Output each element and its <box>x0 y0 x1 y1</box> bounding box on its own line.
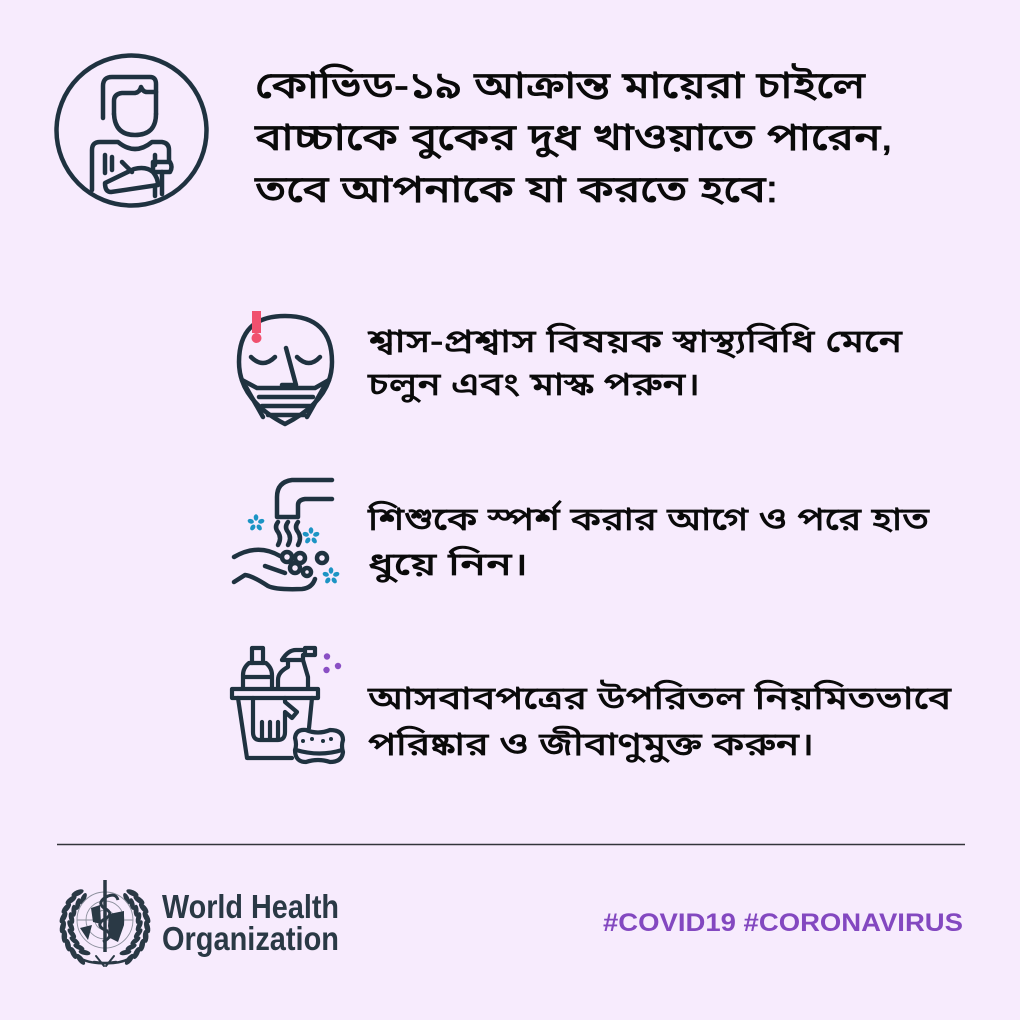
icon: cleaning supplies <box>232 648 343 762</box>
wordmark: World Health <box>162 888 339 925</box>
wordmark: Organization <box>162 920 339 957</box>
text: respiratory hygiene <box>367 323 903 403</box>
icon: mother holding baby <box>56 56 206 206</box>
text: clean surfaces <box>367 680 952 763</box>
text: clean surfaces: পরিষ্কার ও জীবাণুমুক্ত করুন। <box>368 726 814 763</box>
text: wash hands <box>367 500 929 583</box>
text: wash hands: শিশুকে স্পর্শ করার আগে ও পরে হাত <box>367 500 929 537</box>
text: respiratory hygiene: শ্বাস-প্রশ্বাস বিষয়ক স্বাস্থ্যবিধি মেনে <box>367 323 903 359</box>
text: clean surfaces: আসবাবপত্রের উপরিতল নিয়মিতভাবে <box>367 680 952 716</box>
text: respiratory hygiene: চলুন এবং মাস্ক পরুন। <box>367 366 700 403</box>
icon: masked face with alert <box>239 311 332 424</box>
icon: hand washing <box>234 480 340 589</box>
emblem <box>58 880 152 966</box>
text: wash hands: ধুয়ে নিন। <box>368 546 528 583</box>
wordmark <box>162 888 339 957</box>
title <box>254 63 893 211</box>
WHO logo <box>58 880 339 966</box>
title: কোভিড-১৯ আক্রান্ত মায়েরা চাইলে <box>255 63 866 107</box>
title: বাচ্চাকে বুকের দুধ খাওয়াতে পারেন, <box>254 117 893 159</box>
hashtags: #COVID19 #CORONAVIRUS <box>603 909 963 937</box>
title: তবে আপনাকে যা করতে হবে: <box>254 169 778 211</box>
